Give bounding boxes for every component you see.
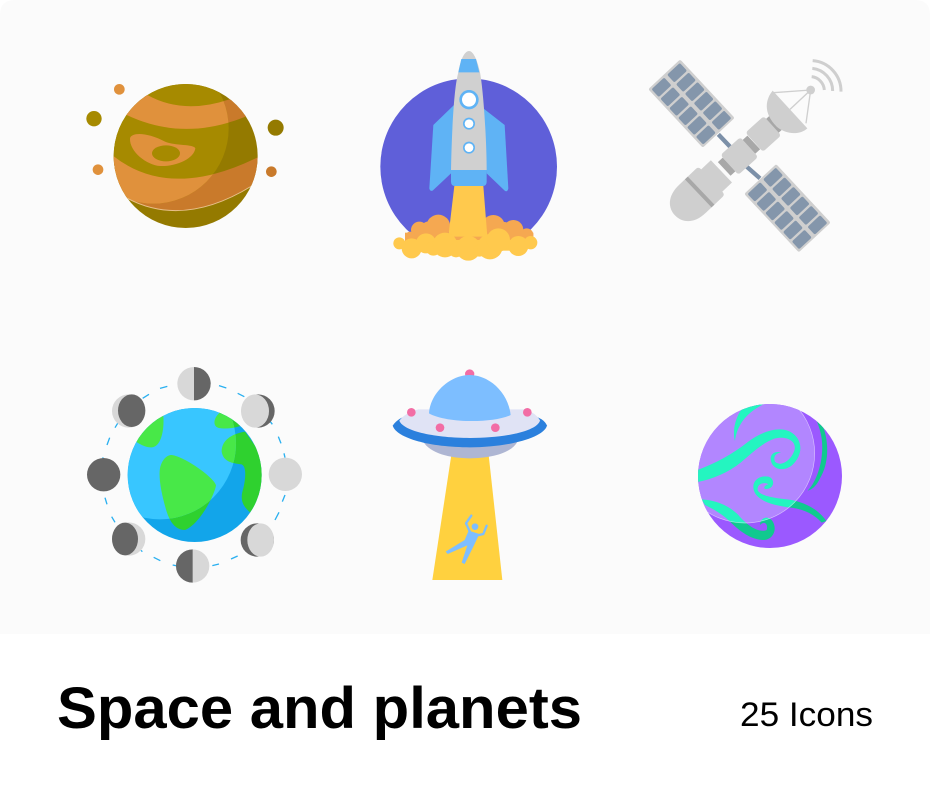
saucer rim xyxy=(393,415,547,447)
saucer disc xyxy=(399,409,540,438)
icon: satellite xyxy=(648,59,841,252)
central hub xyxy=(721,137,758,175)
upper module xyxy=(745,116,781,152)
light beam xyxy=(432,455,502,580)
icon: banded planet with moons xyxy=(86,80,284,233)
earth xyxy=(128,408,262,542)
planet body and swirls xyxy=(698,404,842,548)
dashed orbit xyxy=(103,386,285,566)
planet body xyxy=(114,84,258,228)
connectors xyxy=(718,115,783,176)
icon: swirled purple planet xyxy=(698,404,842,548)
capsule module xyxy=(662,157,735,229)
rocket wings xyxy=(429,105,508,191)
windows xyxy=(459,90,479,154)
orbiting dots xyxy=(86,84,284,177)
icon count: 25 Icons xyxy=(740,696,873,734)
panel struts xyxy=(718,134,760,178)
back smoke xyxy=(405,215,533,243)
rocket body xyxy=(451,51,487,170)
lower solar panel xyxy=(744,164,831,252)
icon: earth with moon phases xyxy=(87,367,302,583)
icon: ufo abduction xyxy=(393,369,547,580)
abducted person xyxy=(446,516,487,564)
nose band xyxy=(458,59,479,72)
nozzle xyxy=(451,170,487,186)
moon phases xyxy=(87,367,302,583)
flame and front smoke xyxy=(393,186,537,261)
saucer lights xyxy=(407,408,532,432)
dish xyxy=(767,91,807,133)
dome xyxy=(429,375,511,421)
icon: rocket launch xyxy=(380,51,557,261)
title: Space and planets xyxy=(57,676,582,741)
underbelly xyxy=(423,442,517,458)
upper solar panel xyxy=(648,59,735,148)
signal waves xyxy=(812,61,841,92)
purple disc xyxy=(380,78,557,255)
top light xyxy=(465,369,474,379)
antenna xyxy=(773,90,811,123)
